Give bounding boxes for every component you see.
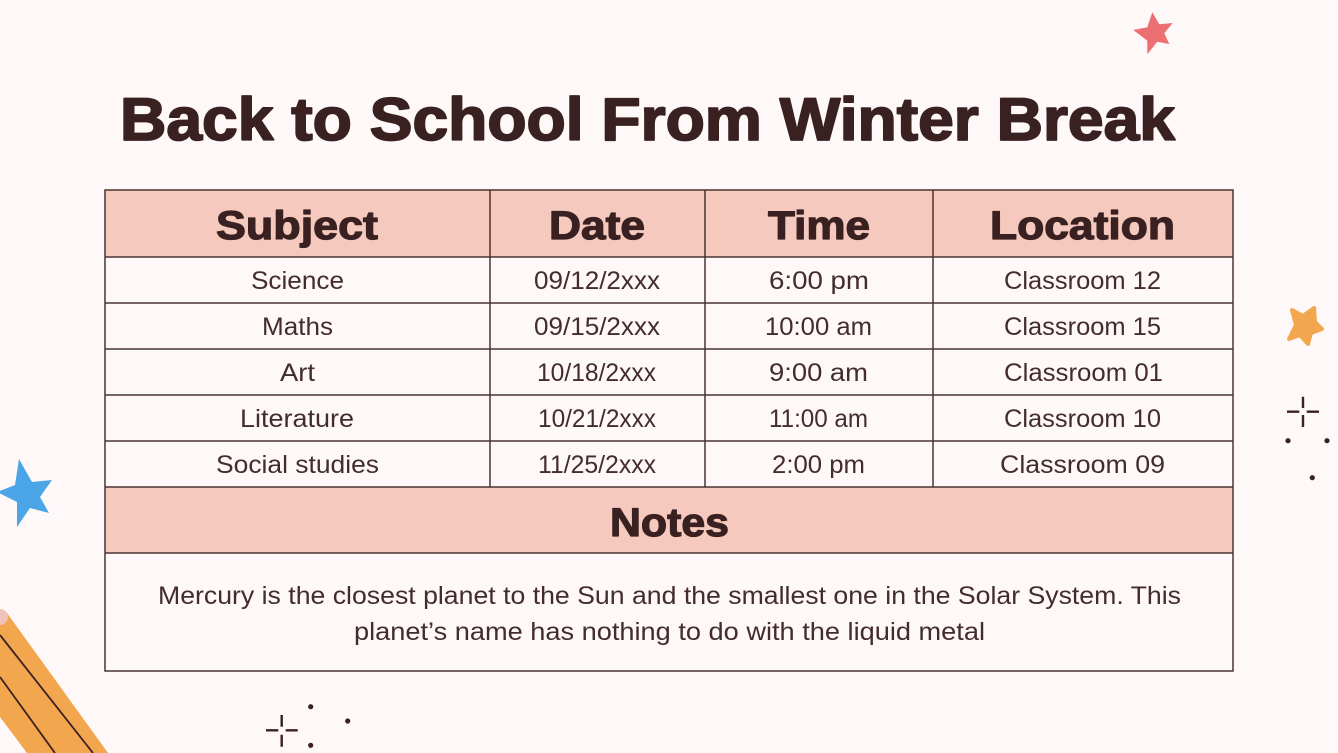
row: Art: Classroom 01 <box>1004 359 1163 387</box>
column header: Location: Location <box>990 204 1175 248</box>
notes text: planet’s name has nothing to do with the liquid metal <box>354 618 985 646</box>
notes header band <box>105 487 1233 553</box>
notes heading: Notes <box>610 501 729 545</box>
column header: Date: Date <box>549 204 645 248</box>
icon: pencil <box>0 609 108 753</box>
row: Literature: 10/21/2xxx <box>538 405 656 433</box>
row: Maths: 09/15/2xxx <box>534 313 661 341</box>
row: Social studies: 11/25/2xxx <box>538 451 656 479</box>
row: Science: 6:00 pm <box>769 267 869 295</box>
row: Science: 09/12/2xxx <box>534 267 661 295</box>
notes text: Mercury is the closest planet to the Sun and the smallest one in the Solar System. This <box>158 582 1181 610</box>
schedule table <box>105 190 1233 671</box>
row: Literature <box>240 405 1161 433</box>
table grid <box>105 190 1233 671</box>
row: Art: Art <box>280 359 315 387</box>
icon: bottom sparkle and dots <box>266 704 350 748</box>
column header: Time: Time <box>768 204 870 248</box>
row: Social studies: Social studies <box>216 451 379 479</box>
row: Literature: 11:00 am <box>769 405 868 433</box>
row: Maths: 10:00 am <box>765 313 872 341</box>
row: Science: Classroom 12 <box>1004 267 1161 295</box>
row: Maths: Classroom 15 <box>1004 313 1161 341</box>
row: Art <box>280 359 1163 387</box>
icon: red star <box>1133 12 1173 54</box>
title: Back to School From Winter Break <box>120 86 1176 153</box>
notes text <box>158 582 1181 646</box>
row: Literature: Literature <box>240 405 354 433</box>
row: Maths: Maths <box>262 313 333 341</box>
row: Social studies: Classroom 09 <box>1000 451 1165 479</box>
table header band <box>105 190 1233 257</box>
icon: blue star <box>0 459 52 527</box>
column header: Subject: Subject <box>216 204 378 248</box>
row: Literature: Classroom 10 <box>1004 405 1161 433</box>
row: Maths <box>262 313 1161 341</box>
row: Social studies: 2:00 pm <box>772 451 865 479</box>
row: Science: Science <box>251 267 344 295</box>
row: Art: 10/18/2xxx <box>537 359 656 387</box>
icon: orange star <box>1289 308 1322 344</box>
row: Social studies <box>216 451 1165 479</box>
row: Science <box>251 267 1161 295</box>
icon: right sparkle and dots <box>1285 397 1330 480</box>
row: Art: 9:00 am <box>769 359 868 387</box>
